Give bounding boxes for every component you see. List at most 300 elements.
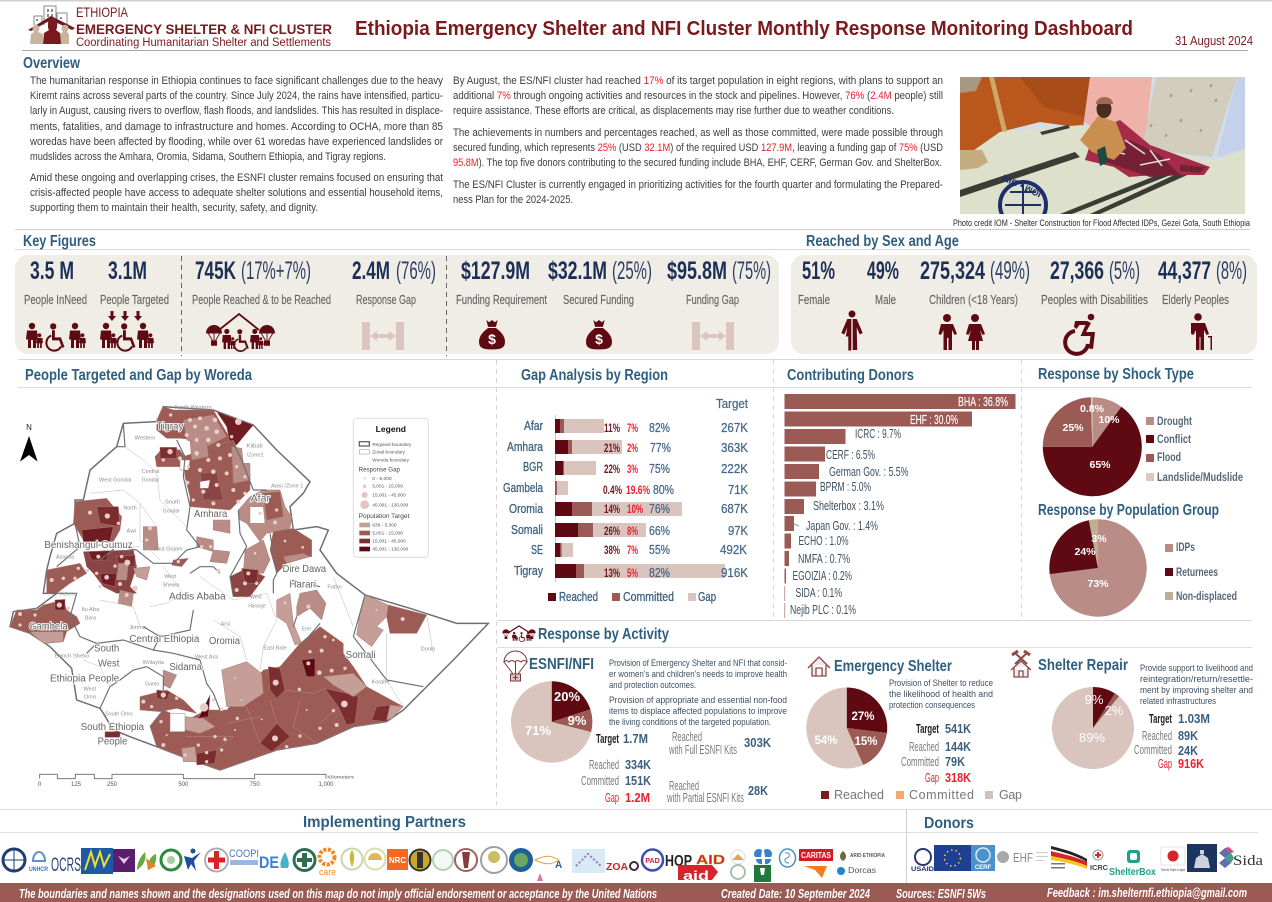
logo: Emergency Shelter and NFI Cluster: ETHIOPIA bbox=[76, 4, 129, 20]
map labels: regions: Benishangul-Gumuz bbox=[44, 540, 133, 551]
map labels: zones: East Bale bbox=[263, 646, 287, 652]
row: Tigray: Tigray bbox=[514, 563, 543, 578]
metric: people reached bbox=[192, 257, 331, 351]
row: Tigray: 5% bbox=[627, 566, 638, 580]
metric: funding requirement: $127.9M bbox=[461, 257, 530, 285]
metric: people in need: People InNeed bbox=[24, 292, 87, 307]
text block: overview right column: The ES/NFI Cluster is currently engaged in prioritizing activities for the fourth quarter and formulating the Prepared- bbox=[453, 179, 943, 191]
pie: ESNFI/NFI: 9% bbox=[568, 713, 587, 728]
row: Oromia: 14% bbox=[604, 502, 620, 516]
map labels: regions bbox=[29, 421, 376, 748]
stats: 541K bbox=[945, 721, 972, 736]
description bbox=[1140, 663, 1253, 707]
map legend: 15,001 - 45,000 bbox=[372, 493, 406, 498]
chart: contributing donors: BHA : 36.8% bbox=[958, 395, 1008, 409]
metric: people targeted: People Targeted bbox=[100, 292, 169, 307]
row: Oromia: 76% bbox=[649, 502, 670, 516]
panel: key figures bbox=[15, 255, 779, 356]
chart: response by shock type pie: 10% bbox=[1098, 414, 1120, 426]
map labels: zones: Fafan bbox=[327, 584, 342, 590]
stats: Reached bbox=[1142, 728, 1172, 743]
row: Tigray: 13% bbox=[604, 566, 620, 580]
map labels: regions: Sidama bbox=[169, 662, 202, 673]
pie: ESNFI/NFI bbox=[511, 681, 592, 763]
logos: donors: USAID bbox=[911, 866, 934, 873]
chart: contributing donors: NMFA : 0.7% bbox=[798, 552, 850, 566]
row: Gambela: 71K bbox=[728, 483, 749, 497]
map labels: zones: Arsi bbox=[221, 622, 230, 628]
icon: north arrow: N bbox=[26, 423, 32, 432]
icon: house bbox=[808, 657, 830, 676]
pie: Shelter Repair: 9% bbox=[1085, 692, 1104, 707]
description: Provision of Emergency Shelter and NFI that consid- bbox=[609, 658, 787, 669]
stats: 318K bbox=[945, 770, 972, 785]
row: BGR: 75% bbox=[649, 462, 670, 476]
text block: overview left column: The humanitarian response in Ethiopia continues to face significant challenges due to the heavy bbox=[30, 75, 443, 87]
metric: children: 275,324 bbox=[920, 257, 985, 285]
row: BGR: BGR bbox=[523, 459, 543, 474]
pie: Shelter Repair bbox=[1052, 687, 1134, 769]
logos: donors: CERF bbox=[975, 865, 991, 871]
stats: with Full ESNFI Kits bbox=[668, 742, 737, 757]
pie: Emergency Shelter: 27% bbox=[851, 711, 875, 723]
map labels: zones: Omo bbox=[84, 695, 96, 701]
logos: implementing partners: Dorcas bbox=[848, 866, 876, 875]
metric: secured funding: $32.1M bbox=[548, 257, 607, 285]
chart legend: Reached bbox=[559, 589, 598, 604]
logos: implementing partners: UNHCR bbox=[29, 867, 49, 873]
map labels: zones: Western bbox=[135, 435, 155, 441]
logos: donors bbox=[911, 844, 1263, 878]
description: and protection outcomes. bbox=[609, 680, 696, 691]
description: the living conditions of the targeted population. bbox=[609, 717, 771, 728]
logos: donors: ShelterBox bbox=[1109, 867, 1156, 878]
metric: male bbox=[867, 257, 899, 307]
map labels: zones: Wolayita bbox=[143, 660, 165, 666]
chart: response by shock type pie bbox=[1043, 397, 1243, 496]
map labels: zones: Kelem bbox=[60, 592, 75, 598]
map labels: regions: Afar bbox=[251, 493, 271, 504]
chart legend bbox=[548, 589, 716, 604]
text block: overview left column: Kiremt rains across several parts of the country. Since July 2024, the rains have intensified, particu- bbox=[30, 90, 443, 102]
map legend: 0 - 5,000 bbox=[372, 476, 392, 481]
row: SE: SE bbox=[531, 542, 543, 557]
description: er women's and children's needs to improve health bbox=[609, 669, 787, 680]
map labels: zones: North Western bbox=[175, 405, 212, 411]
map labels: regions: Central Ethiopia bbox=[129, 634, 200, 645]
chart: contributing donors: German Gov. : 5.5% bbox=[829, 465, 908, 479]
row: SE: 492K bbox=[720, 543, 748, 557]
chart: contributing donors: Shelterbox : 3.1% bbox=[813, 499, 884, 513]
row: Amhara bbox=[507, 439, 749, 455]
panel: Shelter Repair bbox=[1011, 651, 1253, 771]
map labels: regions: West bbox=[98, 659, 120, 670]
stats: 151K bbox=[625, 773, 652, 788]
logo: Emergency Shelter and NFI Cluster: Coordinating Humanitarian Shelter and Settlements bbox=[76, 37, 331, 49]
map scale bar: 125 bbox=[71, 782, 82, 788]
pie legend: Returnees bbox=[1176, 567, 1218, 579]
chart: response by population group pie bbox=[1049, 519, 1237, 617]
map labels: regions: Oromia bbox=[209, 636, 240, 647]
description: reintegration/return/resettle- bbox=[1140, 674, 1253, 685]
map labels: zones: /Zone2 bbox=[247, 452, 263, 458]
icon: hammers and house bbox=[1011, 651, 1031, 677]
logos: implementing partners: care bbox=[319, 867, 336, 877]
photo: woman seated on shelter kit in tent bbox=[960, 77, 1245, 228]
description bbox=[889, 678, 993, 711]
map: people targeted and gap by woreda bbox=[10, 405, 488, 788]
footer band: The boundaries and names shown and the designations used on this map do not imply official endorsement or acceptance by the United Nations bbox=[19, 887, 657, 901]
map scale bar: 1,000 bbox=[319, 782, 334, 788]
row: Afar: 7% bbox=[627, 421, 638, 435]
row: Oromia bbox=[509, 501, 749, 516]
metric: response gap: (76%) bbox=[396, 257, 436, 285]
stats: 24K bbox=[1178, 743, 1199, 758]
heading: Contributing Donors: Contributing Donors bbox=[787, 367, 914, 384]
logos: implementing partners: COOPI bbox=[229, 848, 259, 860]
row: Somali: 66% bbox=[649, 524, 670, 538]
logo: Emergency Shelter and NFI Cluster: EMERGENCY SHELTER & NFI CLUSTER bbox=[76, 21, 332, 37]
text block: overview left column: supporting them to maintain their health, security, safety, and dignity. bbox=[30, 202, 318, 214]
map labels: regions: Tigray bbox=[157, 421, 183, 432]
pie legend: Non-displaced bbox=[1176, 591, 1237, 603]
pie legend: IDPs bbox=[1176, 542, 1195, 554]
chart: contributing donors: EGOIZIA : 0.2% bbox=[792, 569, 852, 583]
map labels: regions: People bbox=[98, 737, 128, 748]
metric: funding gap: (75%) bbox=[732, 257, 771, 285]
pie legend: Landslide/Mudslide bbox=[1157, 472, 1243, 484]
map legend: 639 - 5,000 bbox=[372, 522, 397, 527]
chart: contributing donors: BPRM : 5.0% bbox=[820, 480, 871, 494]
chart: contributing donors: Nejib PLC : 0.1% bbox=[790, 603, 856, 617]
map labels: regions: South Ethiopia bbox=[81, 722, 144, 733]
stats: Reached bbox=[672, 729, 702, 744]
row: Gambela: Gambela bbox=[503, 480, 544, 495]
metric: response gap: Response Gap bbox=[356, 292, 416, 307]
map labels: zones: Ilu Aba bbox=[82, 607, 100, 613]
metric: secured funding: (25%) bbox=[612, 257, 652, 285]
photo: woman seated on shelter kit in tent: IOM • OIM bbox=[1000, 172, 1043, 199]
pie: ESNFI/NFI: 71% bbox=[525, 723, 551, 738]
map labels: regions: Addis Ababa bbox=[169, 592, 226, 603]
pie legend: Drought bbox=[1157, 416, 1192, 428]
logos: implementing partners: ARID ETHIOPIA bbox=[850, 853, 885, 859]
panel: ESNFI/NFI: ESNFI/NFI bbox=[529, 656, 594, 673]
map scale bar: 500 bbox=[178, 782, 189, 788]
metric: elderly peoples: Elderly Peoples bbox=[1162, 292, 1229, 307]
stats: Target bbox=[1149, 711, 1172, 726]
stats: 916K bbox=[1178, 756, 1205, 771]
text block: overview right column: additional 7% through ongoing activities and resources in the stock and pipelines. However, 76% (2.4M people) still bbox=[453, 90, 943, 102]
stats: Committed bbox=[581, 773, 619, 788]
metric: people targeted bbox=[100, 257, 169, 351]
row: BGR: 22% bbox=[604, 462, 620, 476]
text block: overview right column: By August, the ES/NFI cluster had reached 17% of its target population in eight regions, with plans to support an bbox=[453, 75, 943, 87]
pie: Emergency Shelter bbox=[806, 688, 887, 768]
chart: gap analysis by region bbox=[503, 397, 749, 604]
row: Amhara: 363K bbox=[721, 441, 749, 455]
text block: overview right column: 95.8M). The top five donors contributing to the secured funding include BHA, EHF, CERF, German Gov. and ShelterBox. bbox=[453, 157, 942, 169]
stats: with Partial ESNFI Kits bbox=[666, 790, 744, 805]
logos: implementing partners: DE bbox=[259, 853, 279, 872]
metric: elderly peoples: (8%) bbox=[1216, 257, 1247, 285]
map choropleth: population target by woreda bbox=[10, 407, 427, 770]
row: Somali: 97K bbox=[728, 524, 749, 538]
description: related infrastructures bbox=[1140, 696, 1216, 707]
metric: people in need bbox=[24, 257, 87, 351]
metric: funding requirement: Funding Requirement bbox=[456, 292, 547, 307]
map labels: zones: Bora bbox=[85, 615, 97, 621]
stats: Gap bbox=[605, 790, 619, 805]
heading: Gap Analysis by Region: Gap Analysis by Region bbox=[521, 367, 668, 384]
metric: female: 51% bbox=[802, 257, 835, 285]
row: Somali: Somali bbox=[511, 522, 543, 537]
map labels: zones: West Arsi bbox=[195, 654, 218, 660]
panel: Emergency Shelter: Emergency Shelter bbox=[834, 658, 952, 675]
row: Amhara: 77% bbox=[650, 441, 671, 455]
metric: male: Male bbox=[875, 292, 896, 307]
logos: implementing partners bbox=[3, 847, 885, 883]
row: Oromia: 687K bbox=[721, 502, 749, 516]
chart: response by shock type pie: 65% bbox=[1089, 459, 1111, 471]
chart legend: Committed bbox=[623, 589, 674, 604]
text block: overview right column: require assistance. These efforts are critical, as displacements may rise further due to weather conditions. bbox=[453, 105, 894, 117]
pie: Shelter Repair: 2% bbox=[1105, 703, 1124, 718]
text block: overview left column: mudslides across the Amhara, Oromia, Sidama, Southern Ethiopia, and Tigray regions. bbox=[30, 151, 386, 163]
panel: Shelter Repair: Shelter Repair bbox=[1038, 657, 1128, 674]
map legend: Woreda boundary bbox=[372, 458, 410, 463]
logos: donors: From the People of Japan bbox=[1161, 868, 1185, 872]
metric: people reached: People Reached & to be Reached bbox=[192, 292, 331, 307]
pie legend: Flood bbox=[1157, 452, 1181, 464]
logo: Emergency Shelter and NFI Cluster bbox=[28, 4, 332, 49]
stats: 303K bbox=[744, 735, 772, 750]
map labels: regions: South bbox=[94, 644, 119, 655]
pie: Emergency Shelter: 54% bbox=[814, 735, 838, 747]
metric: people reached: (17%+7%) bbox=[241, 257, 311, 285]
pie legend bbox=[1146, 416, 1243, 484]
metric: elderly peoples bbox=[1158, 257, 1247, 350]
row: Afar: 82% bbox=[649, 421, 670, 435]
row: Tigray bbox=[514, 563, 749, 580]
icon: north arrow bbox=[20, 423, 38, 462]
stats: Reached bbox=[669, 778, 699, 793]
text block: overview left column: crisis-affected people have access to adequate shelter solutions and essential household items, bbox=[30, 187, 443, 199]
map scale bar: 0 bbox=[38, 782, 42, 788]
stats: 1.7M bbox=[623, 731, 648, 746]
metric: response gap bbox=[352, 257, 436, 350]
footer band: Sources: ESNFI 5Ws bbox=[896, 887, 986, 901]
map labels: zones: Central bbox=[142, 469, 159, 475]
map labels: zones: Doolo bbox=[421, 646, 435, 652]
footer band: Created Date: 10 September 2024 bbox=[721, 887, 870, 901]
chart: contributing donors: Japan Gov. : 1.4% bbox=[806, 519, 878, 533]
logos: implementing partners: aid bbox=[683, 868, 709, 883]
chart: contributing donors: ECHO : 1.0% bbox=[798, 534, 848, 548]
map labels: zones: Awi bbox=[127, 529, 136, 535]
text block: overview right column bbox=[453, 75, 943, 206]
chart legend: Gap bbox=[698, 589, 716, 604]
map legend: Regional boundary bbox=[372, 442, 412, 447]
row: Somali bbox=[511, 522, 749, 538]
metric: people reached: 745K bbox=[195, 257, 236, 285]
logos: implementing partners: OCRS bbox=[51, 855, 81, 876]
icon: female and male bbox=[841, 310, 863, 350]
metric: elderly peoples: 44,377 bbox=[1158, 257, 1211, 285]
chart: response by shock type pie: 0.8% bbox=[1080, 403, 1105, 415]
pie legend: Conflict bbox=[1157, 434, 1191, 446]
row: Tigray: 82% bbox=[649, 566, 670, 580]
metric: funding gap: $95.8M bbox=[667, 257, 727, 285]
description: items to displace affected populations to improve bbox=[609, 706, 787, 717]
row: Afar: Afar bbox=[524, 418, 544, 433]
logos: implementing partners: NRC bbox=[389, 856, 406, 865]
panel: Emergency Shelter bbox=[806, 657, 1022, 802]
map labels: zones: Assosa bbox=[56, 554, 75, 560]
map labels: zones: West bbox=[250, 594, 262, 600]
heading: Reached by Sex and Age: Reached by Sex and Age bbox=[806, 233, 959, 250]
text block: overview left column: larly in August, causing rivers to overflow, flash floods, and landslides. This has resulted in displace- bbox=[30, 105, 443, 117]
stats bbox=[901, 721, 972, 785]
stats: 144K bbox=[945, 739, 972, 754]
row: BGR: 3% bbox=[627, 462, 638, 476]
map base: Ethiopia outline bbox=[10, 407, 488, 770]
row: Gambela: 0.4% bbox=[603, 483, 622, 497]
metric: children: Children (<18 Years) bbox=[929, 292, 1018, 307]
map labels: zones: Gamo bbox=[145, 681, 159, 687]
map scale bar bbox=[38, 774, 355, 788]
row: Afar: 11% bbox=[604, 421, 620, 435]
row: SE: 7% bbox=[627, 543, 638, 557]
map labels: zones: North bbox=[123, 506, 137, 512]
text block: overview right column: The achievements in numbers and percentages reached, as well as those committed, were made possible through bbox=[453, 127, 943, 139]
text block: overview left column: ments, fatalities, and damage to infrastructure and homes. According to OCHA, more than 85 bbox=[30, 121, 443, 133]
panel: reached by sex and age bbox=[791, 255, 1257, 354]
row: Gambela: 80% bbox=[653, 483, 674, 497]
chart: response by population group pie: 3% bbox=[1091, 533, 1107, 545]
pie legend: Reached bbox=[834, 788, 884, 802]
row: SE: 55% bbox=[649, 543, 670, 557]
row: Oromia: Oromia bbox=[509, 501, 544, 516]
map labels: regions: Ethiopia People bbox=[50, 673, 120, 684]
stats: Target bbox=[596, 731, 619, 746]
map legend: Population Target bbox=[359, 514, 410, 520]
stats: 89K bbox=[1178, 728, 1199, 743]
row: Amhara: 2% bbox=[627, 441, 638, 455]
logos: implementing partners: AID bbox=[696, 852, 725, 867]
logos: donors: Sida bbox=[1233, 853, 1263, 869]
map legend: Legend bbox=[376, 425, 406, 434]
map legend: 5,001 - 15,000 bbox=[372, 484, 404, 489]
map labels: zones: West Gondar bbox=[99, 477, 132, 483]
map labels: zones: South Omo bbox=[105, 712, 133, 718]
map labels: zones: West bbox=[83, 686, 96, 692]
map legend: 15,001 - 45,000 bbox=[372, 538, 406, 543]
description: the likelihood of health and bbox=[889, 689, 993, 700]
heading: Response by Shock Type: Response by Shock Type bbox=[1038, 366, 1194, 383]
chart: contributing donors: EHF : 30.0% bbox=[910, 413, 958, 427]
metric: peoples with disabilities: Peoples with Disabilities bbox=[1041, 292, 1148, 307]
row: Amhara: Amhara bbox=[507, 439, 544, 454]
logos: implementing partners: HOP bbox=[665, 853, 692, 870]
pie legend: Committed bbox=[909, 788, 974, 802]
logos: implementing partners: A bbox=[555, 860, 562, 871]
metric: peoples with disabilities: (5%) bbox=[1109, 257, 1140, 285]
metric: peoples with disabilities bbox=[1041, 257, 1148, 354]
metric: children bbox=[920, 257, 1030, 350]
map labels: regions: Amhara bbox=[194, 509, 228, 520]
row: Tigray: 916K bbox=[721, 566, 749, 580]
text block: overview right column: secured funding, which represents 25% (USD 32.1M) of the required USD 127.9M, leaving a funding gap of 75% (USD bbox=[453, 142, 943, 154]
description: Provision of appropriate and essential non-food bbox=[609, 695, 787, 706]
chart: contributing donors: ICRC : 9.7% bbox=[855, 427, 901, 441]
metric: secured funding: Secured Funding bbox=[563, 292, 634, 307]
map scale bar: 750 bbox=[250, 782, 260, 788]
map labels: zones: Korahe bbox=[372, 680, 389, 686]
row: Oromia: 10% bbox=[627, 502, 643, 516]
chart: contributing donors bbox=[784, 394, 1016, 618]
map labels: zones: Gondar bbox=[163, 508, 180, 514]
row: BGR bbox=[523, 459, 749, 476]
title: Ethiopia Emergency Shelter and NFI Cluster Monthly Response Monitoring Dashboard bbox=[355, 17, 1133, 40]
description: protection consequences bbox=[889, 700, 975, 711]
icon: parachute bbox=[504, 651, 527, 681]
chart: gap analysis by region: Target bbox=[716, 397, 748, 411]
text block: overview left column: Amid these ongoing and overlapping crises, the ESNFI cluster remains focused on ensuring that bbox=[30, 172, 443, 184]
metric: funding gap: Funding Gap bbox=[686, 292, 739, 307]
metric: funding requirement: $ bbox=[488, 331, 496, 347]
date: 31 August 2024 bbox=[1175, 34, 1253, 48]
metric: secured funding: $ bbox=[595, 331, 603, 347]
logos: donors: ICRC bbox=[1090, 863, 1109, 872]
map labels: regions: Gambela bbox=[29, 621, 68, 632]
map labels: regions: Somali bbox=[346, 650, 376, 661]
map legend: Zonal boundary bbox=[372, 450, 406, 455]
chart: response by population group pie: 73% bbox=[1087, 578, 1109, 590]
logos: implementing partners: PAD bbox=[645, 858, 660, 865]
heading: Response by Activity: Response by Activity bbox=[538, 626, 669, 643]
map labels: zones: Awsi /Zone 1 bbox=[271, 483, 303, 489]
row: BGR: 222K bbox=[721, 462, 749, 476]
text block: overview left column: woredas have been affected by flooding, while over 61 woredas have experienced landslides or bbox=[29, 136, 443, 148]
map labels: zones: Kilbati bbox=[247, 443, 263, 449]
map labels: zones: Bench Sheko bbox=[55, 654, 89, 660]
heading: Donors: Donors bbox=[924, 815, 974, 832]
row: Afar: 267K bbox=[721, 421, 749, 435]
stats: 28K bbox=[748, 783, 769, 798]
map labels: zones bbox=[55, 405, 435, 718]
row: Amhara: 21% bbox=[604, 441, 620, 455]
map legend bbox=[353, 418, 428, 557]
map labels: zones: Gondar bbox=[142, 477, 159, 483]
pie legend bbox=[1165, 542, 1237, 603]
heading: Implementing Partners: Implementing Partners bbox=[303, 814, 466, 831]
map labels: zones: East Gojam bbox=[153, 546, 183, 552]
stats: Reached bbox=[909, 739, 939, 754]
map labels: zones: South bbox=[165, 499, 180, 505]
map boundaries: regions and zones bbox=[50, 423, 423, 727]
icon: response by activity bbox=[502, 626, 536, 642]
stats: Target bbox=[916, 721, 939, 736]
row: SE bbox=[531, 542, 748, 557]
pie legend: Gap bbox=[999, 788, 1022, 802]
panel: ESNFI/NFI bbox=[504, 651, 787, 805]
map labels: zones: Hararge bbox=[248, 604, 266, 610]
footer band bbox=[0, 883, 1272, 902]
description: Provision of Shelter to reduce bbox=[889, 678, 993, 689]
logos: donors: EHF bbox=[1013, 850, 1033, 865]
chart: response by population group pie: 24% bbox=[1074, 546, 1096, 558]
